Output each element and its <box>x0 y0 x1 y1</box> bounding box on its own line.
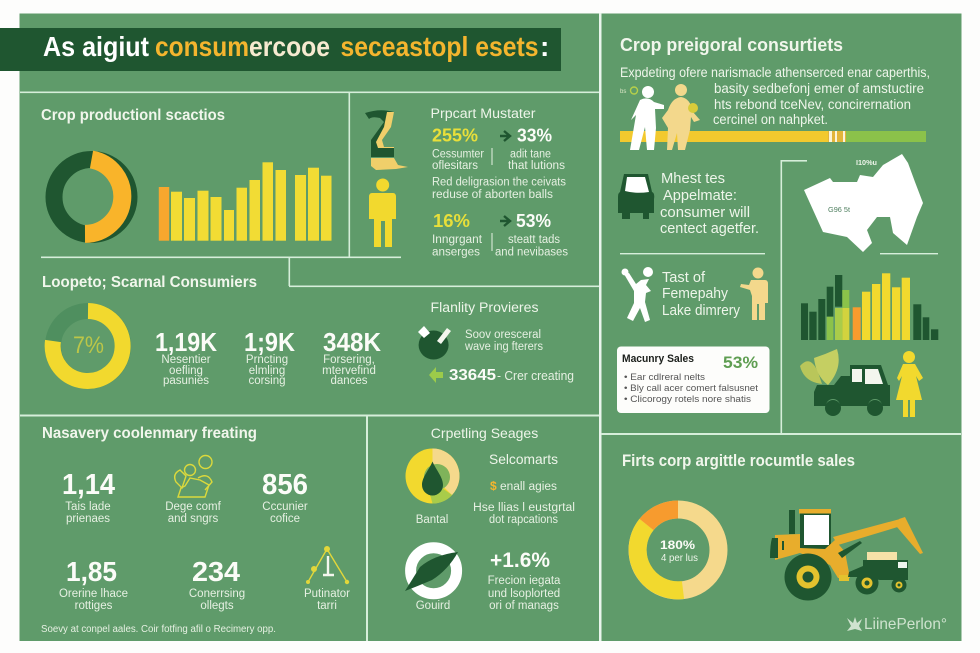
stat: 856: 856 <box>262 469 308 501</box>
icon: vehicle front <box>618 174 654 219</box>
donut chart: sales: 4 per lus <box>661 552 698 564</box>
stat: 16 percent: 16% <box>433 211 470 231</box>
stat: 234 <box>189 556 245 612</box>
icon caption: group <box>165 501 222 525</box>
stat: 1;9K: elmling <box>249 365 285 377</box>
stat: 856: Cccunier <box>262 501 308 513</box>
icon: white person and helper: bs <box>620 89 626 95</box>
card: mercury sales: Macunry Sales <box>622 353 694 365</box>
icon: white person and helper <box>620 84 700 150</box>
stat: 348K <box>322 327 381 387</box>
text block: segments: $ <box>490 479 497 493</box>
stat labels: first row: that lutions <box>508 160 565 172</box>
bar chart: regional <box>801 273 938 340</box>
text block: highest rates <box>660 170 759 237</box>
stat: 1,19K: Nesentier <box>161 354 211 366</box>
stat: 1,14: Tais lade <box>65 501 111 513</box>
icon caption: pollinator: tarri <box>317 600 337 612</box>
text block: segments: enall agies <box>500 481 557 493</box>
stat: 1,14 <box>62 469 115 525</box>
text block: segments: Selcomarts <box>489 451 558 467</box>
text block: taste of company <box>662 269 740 319</box>
panel: secondary forecasting <box>41 425 350 635</box>
card: mercury sales: • Clicorogy rotels nore shatis <box>624 394 751 405</box>
stat: plus 1.6 percent: und lsoplorted <box>488 588 560 600</box>
text block: segments <box>473 451 575 526</box>
icon: provider badge <box>418 326 451 360</box>
text block: reduction note: reduse of aborten balls <box>432 189 553 201</box>
icon: yellow woman <box>896 351 923 417</box>
donut chart: sales: 180% <box>660 538 695 552</box>
stat: plus 1.6 percent: ori of manags <box>489 600 559 612</box>
stat: 1,85: rottiges <box>75 600 113 612</box>
footnote: Soevy at conpel aales. Coir fotfing afil o Recimery opp. <box>41 624 276 635</box>
text block: highest rates: Mhest tes <box>661 170 725 187</box>
arrow <box>500 131 510 141</box>
stat: 1;9K: 1;9K <box>244 327 295 357</box>
stat: 1,85: 1,85 <box>66 556 117 587</box>
icon caption: pollinator: Putinator <box>304 588 350 600</box>
icon: running person <box>622 267 653 322</box>
map: G96 5t <box>828 205 851 214</box>
stat labels: second row: Inngrgant <box>432 234 483 246</box>
stat labels: first row: Cessumter <box>432 149 484 161</box>
stat: 33645: - Crer creating <box>497 369 574 383</box>
heading: product muster: Prpcart Mustater <box>430 106 536 121</box>
heading: crop regional consultants: Crop preigoral consurtiets <box>620 35 843 55</box>
stat: 348K: mtervefind <box>322 365 376 377</box>
heading: seasonal consumers: Loopeto; Scarnal Consumiers <box>42 274 257 291</box>
stat: 1,19K: oefling <box>169 365 203 377</box>
title banner: : <box>540 31 549 62</box>
title banner: ercooe <box>249 31 330 62</box>
stat labels: second row <box>432 233 568 259</box>
donut chart: crop production <box>54 160 129 234</box>
heading: quality providers: Flanlity Provieres <box>430 300 539 315</box>
stat labels: second row: anserges <box>432 247 480 259</box>
label: bantal: Bantal <box>416 514 448 526</box>
card: mercury sales: 53% <box>723 353 758 372</box>
icon caption: group: Dege comf <box>165 501 222 513</box>
text block: highest rates: centect agetfer. <box>660 220 759 237</box>
stat: 234: 234 <box>192 556 240 587</box>
heading: crop production: Crop productionl scactios <box>41 107 225 124</box>
stat: 348K: Forsering, <box>323 354 375 366</box>
text block: reduction note <box>432 177 566 201</box>
icon: line group <box>175 456 212 497</box>
icon: tractor with trailer <box>770 509 923 600</box>
text block: provider note <box>464 329 543 353</box>
stat: plus 1.6 percent: +1.6% <box>490 549 550 572</box>
stat: 856: cofice <box>270 513 300 525</box>
panel: crop regional consultants <box>617 35 938 417</box>
title banner <box>0 28 561 71</box>
text block: highest rates: consumer will <box>660 204 750 221</box>
stat labels: second row: and nevibases <box>495 247 568 259</box>
stat: 1,19K: pasunies <box>163 375 209 387</box>
label: gourd: Gouird <box>416 600 450 612</box>
stat: 234: Conerrsing <box>189 588 245 600</box>
arrow <box>500 216 510 226</box>
stat: 33645 <box>449 367 574 384</box>
text block: intro continued: basity sedbefonj emer of amstuctire <box>714 81 924 96</box>
stat: 234: ollegts <box>200 600 234 612</box>
card: mercury sales: • Bly call acer comert falsusnet <box>624 383 758 394</box>
text block: highest rates: Appelmate: <box>663 187 737 204</box>
card: mercury sales: • Ear cdlreral nelts <box>624 372 705 383</box>
stat: 1,14: prienaes <box>66 513 110 525</box>
stat: 1,19K: 1,19K <box>155 327 217 357</box>
stat: 33 percent: 33% <box>517 126 552 146</box>
stat: 1;9K: corsing <box>248 375 286 387</box>
text block: segments: Hse llias l eustgrtal <box>473 502 575 514</box>
donut chart: 7 percent: 7% <box>73 332 104 359</box>
pie chart: bantal <box>406 448 460 504</box>
title banner: seceastopl esets <box>340 31 538 62</box>
stat: 255 percent: 255% <box>432 126 478 146</box>
text block: taste of company: Lake dimrery <box>662 302 740 319</box>
panel: product muster <box>365 106 568 259</box>
text block: reduction note: Red deligrasion the ceivats <box>432 177 566 189</box>
icon: yellow person <box>369 178 396 247</box>
stat labels: first row <box>432 148 565 172</box>
icon: pollinator network <box>306 546 349 584</box>
title banner: consum <box>155 31 249 62</box>
text block: taste of company: Tast of <box>662 269 706 286</box>
text block: provider note: Soov oresceral <box>465 329 541 341</box>
heading: competing stages: Crpetling Seages <box>431 425 538 441</box>
text block: intro line: Expdeting ofere narismacle athenserced enar caperthis, <box>620 65 930 80</box>
logo: LiinePerlon° <box>864 616 947 633</box>
panel: first crop agricultural sales <box>622 451 947 633</box>
map: I10%u <box>856 158 877 167</box>
icon: dark truck <box>814 365 890 416</box>
icon: leaf <box>800 349 839 385</box>
donut chart: sales <box>638 510 718 590</box>
stat: 33645: 33645 <box>449 367 496 384</box>
icon: ring with leaf <box>405 548 458 594</box>
text block: intro continued: hts rebond tceNev, concirernation <box>714 97 911 112</box>
icon: green arrow <box>429 367 443 383</box>
panel: competing stages <box>405 425 575 612</box>
icon caption: pollinator <box>304 588 350 612</box>
stat: 1,14: 1,14 <box>62 469 115 501</box>
stat: 348K: 348K <box>323 327 381 357</box>
panel: quality providers <box>418 300 574 384</box>
stat labels: second row: steatt tads <box>508 234 560 246</box>
icon: abstract figure <box>365 110 408 170</box>
donut chart: 7 percent <box>53 311 123 381</box>
stat: 53 percent: 53% <box>516 211 551 231</box>
card: mercury sales <box>617 346 770 413</box>
text block: intro continued: cercinel on nahpket. <box>713 112 828 127</box>
text block: segments: dot rapcations <box>489 514 558 526</box>
panel: crop production <box>41 107 332 241</box>
map <box>804 154 923 252</box>
stat: 1,85: Orerine lhace <box>59 588 128 600</box>
heading: secondary forecasting: Nasavery coolenmary freating <box>42 425 257 442</box>
title banner: As aigiut <box>43 31 149 62</box>
stat labels: first row: oflesitars <box>432 160 478 172</box>
stat: 1;9K <box>244 327 295 387</box>
panel: seasonal consumers <box>42 274 381 387</box>
text block: provider note: wave ing fterers <box>464 341 543 353</box>
stat: plus 1.6 percent: Frecion iegata <box>488 575 561 587</box>
stat: 1,85 <box>59 556 128 612</box>
icon caption: group: and sngrs <box>168 513 218 525</box>
stat: 856 <box>262 469 308 525</box>
heading: first crop sales: Firts corp argittle rocumtle sales <box>622 451 855 470</box>
stat: 348K: dances <box>330 375 368 387</box>
bar chart: crop production <box>159 162 332 241</box>
stat: plus 1.6 percent <box>488 549 561 612</box>
progress bar <box>620 131 926 142</box>
icon: beige person <box>740 268 768 320</box>
stat labels: first row: adit tane <box>510 149 551 161</box>
stat: 1;9K: Prncting <box>246 354 288 366</box>
text block: taste of company: Femepahy <box>662 285 728 302</box>
stat: 1,19K <box>155 327 217 387</box>
text block: intro continued <box>713 81 924 127</box>
